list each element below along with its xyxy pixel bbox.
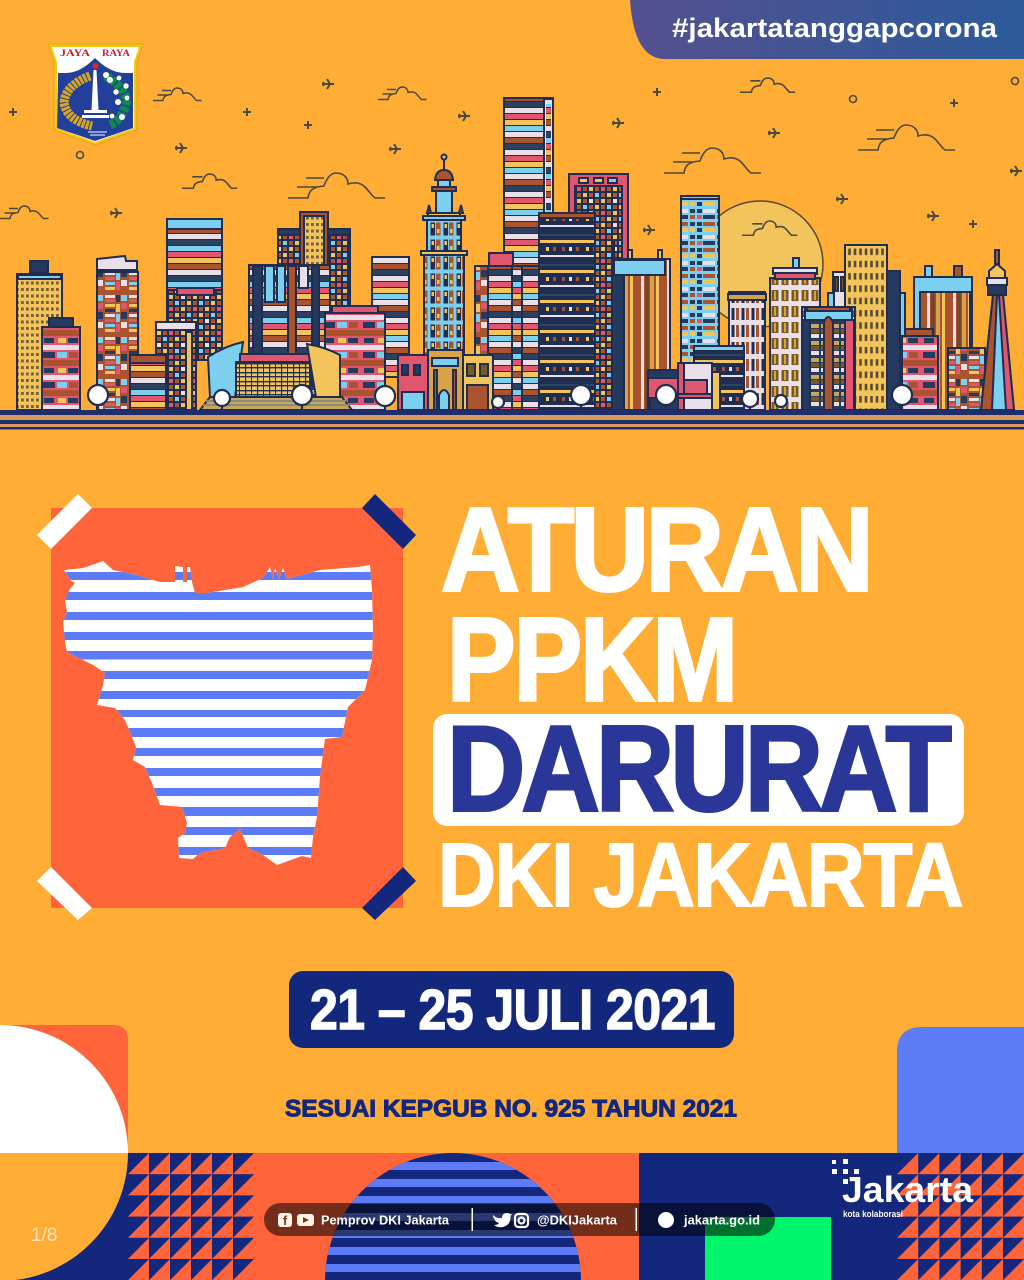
yellow curved wing: [307, 344, 340, 397]
label: Pemprov DKI Jakarta: Pemprov DKI Jakarta: [321, 1214, 450, 1228]
low striped block: [130, 355, 166, 410]
city skyline illustration: [17, 98, 1014, 410]
tallest striped tower: [504, 98, 553, 268]
divider: [472, 1208, 473, 1231]
social media pill: [264, 1203, 775, 1236]
icon: facebook: f: [283, 1213, 288, 1228]
icon: website: [658, 1212, 674, 1228]
title line: ATURAN: ATURAN: [441, 484, 870, 616]
Jakarta logo: kota kolaborasi: [843, 1209, 903, 1219]
decor: orange quarter circle: [0, 1153, 128, 1280]
low building group: [648, 370, 680, 410]
communication tower: [981, 250, 1014, 410]
tape: bottom left: [37, 867, 92, 920]
hashtag tab: [630, 0, 1024, 59]
blue curved wing: [208, 342, 243, 397]
title: [433, 484, 964, 926]
striped block far left: [42, 318, 80, 410]
divider: [636, 1208, 637, 1231]
stepped base: [200, 397, 352, 410]
ground stripes: [0, 410, 1024, 430]
tape: top right: [362, 494, 416, 549]
striped blue-top tower: [167, 219, 222, 360]
pink low building: [902, 329, 938, 410]
page number: 1/8: [31, 1225, 57, 1246]
building with arch: [802, 307, 855, 410]
logo: Jaya Raya shield: RAYA: [102, 49, 130, 59]
dark side building: [887, 271, 905, 410]
clock tower: [421, 154, 467, 355]
cloud in front of sun: [742, 221, 797, 235]
title line: DKI JAKARTA: DKI JAKARTA: [438, 826, 962, 926]
hashtag tab: #jakartatanggapcorona: [672, 13, 998, 43]
back twin tower: [278, 212, 350, 349]
title line: PPKM: PPKM: [447, 594, 736, 726]
decor: top-left coral block with white circle: [0, 1025, 128, 1153]
lavender-top block: [156, 322, 196, 410]
decor: triangle pattern left: [128, 1153, 254, 1280]
logo: Jaya Raya shield: JAYA: [60, 49, 90, 59]
blue-crown building: [914, 266, 972, 410]
white frame tower: [728, 292, 766, 410]
label: @DKIJakarta: @DKIJakarta: [537, 1214, 618, 1228]
logo: Jaya Raya shield: [48, 44, 143, 145]
pink grid block: [325, 306, 385, 410]
colourful column beside dark tower: [594, 240, 614, 410]
pink and lavender building: [678, 363, 720, 410]
striped block left of dark tower: [475, 253, 539, 410]
Jakarta logo: Jakarta: [842, 1169, 974, 1210]
sun: [697, 201, 823, 327]
sky decorations: clouds, planes, stars: [0, 78, 1022, 235]
low mixed building: [948, 348, 985, 410]
legal reference: SESUAI KEPGUB NO. 925 TAHUN 2021: [285, 1096, 737, 1122]
map of Jakarta with stripes: [55, 555, 380, 870]
middle pavilion: [236, 354, 310, 398]
icon: youtube: [297, 1214, 314, 1226]
navy right section: [639, 1153, 1024, 1280]
tower with white frame and brown windows: [770, 258, 820, 410]
yellow tall building: [845, 245, 887, 410]
mosaic tower: [97, 256, 138, 410]
icon: twitter: [493, 1213, 512, 1227]
tape: top left: [37, 494, 92, 549]
decor: striped semicircle: [325, 1153, 581, 1280]
decor: blue rounded block: [897, 1027, 1024, 1153]
label: jakarta.go.id: jakarta.go.id: [683, 1214, 760, 1228]
tape: bottom right: [362, 867, 416, 920]
footer band: [0, 1153, 1024, 1280]
blue lattice tower: [681, 196, 719, 366]
decor: triangle pattern right: [897, 1153, 1024, 1280]
icon: facebook: [278, 1213, 292, 1228]
trees: [88, 385, 912, 410]
icon: instagram: [515, 1214, 528, 1227]
Jakarta logo: [832, 1159, 974, 1219]
panel: Jakarta map card: [37, 494, 416, 920]
historic buildings: [398, 350, 493, 410]
teal-topped low block: [694, 346, 744, 410]
right back striped tower: [372, 257, 409, 377]
light narrow buildings: [828, 272, 846, 330]
date badge: 21 – 25 JULI 2021: [310, 978, 715, 1042]
pink tower: [569, 174, 628, 324]
title highlight: DARURAT: DARURAT: [447, 700, 951, 836]
yellow block far left: [17, 261, 62, 410]
dark tower: [539, 213, 595, 410]
wide columned block: [249, 265, 330, 395]
decor: green block: [705, 1217, 831, 1280]
orange tower with blue top: [612, 250, 670, 410]
